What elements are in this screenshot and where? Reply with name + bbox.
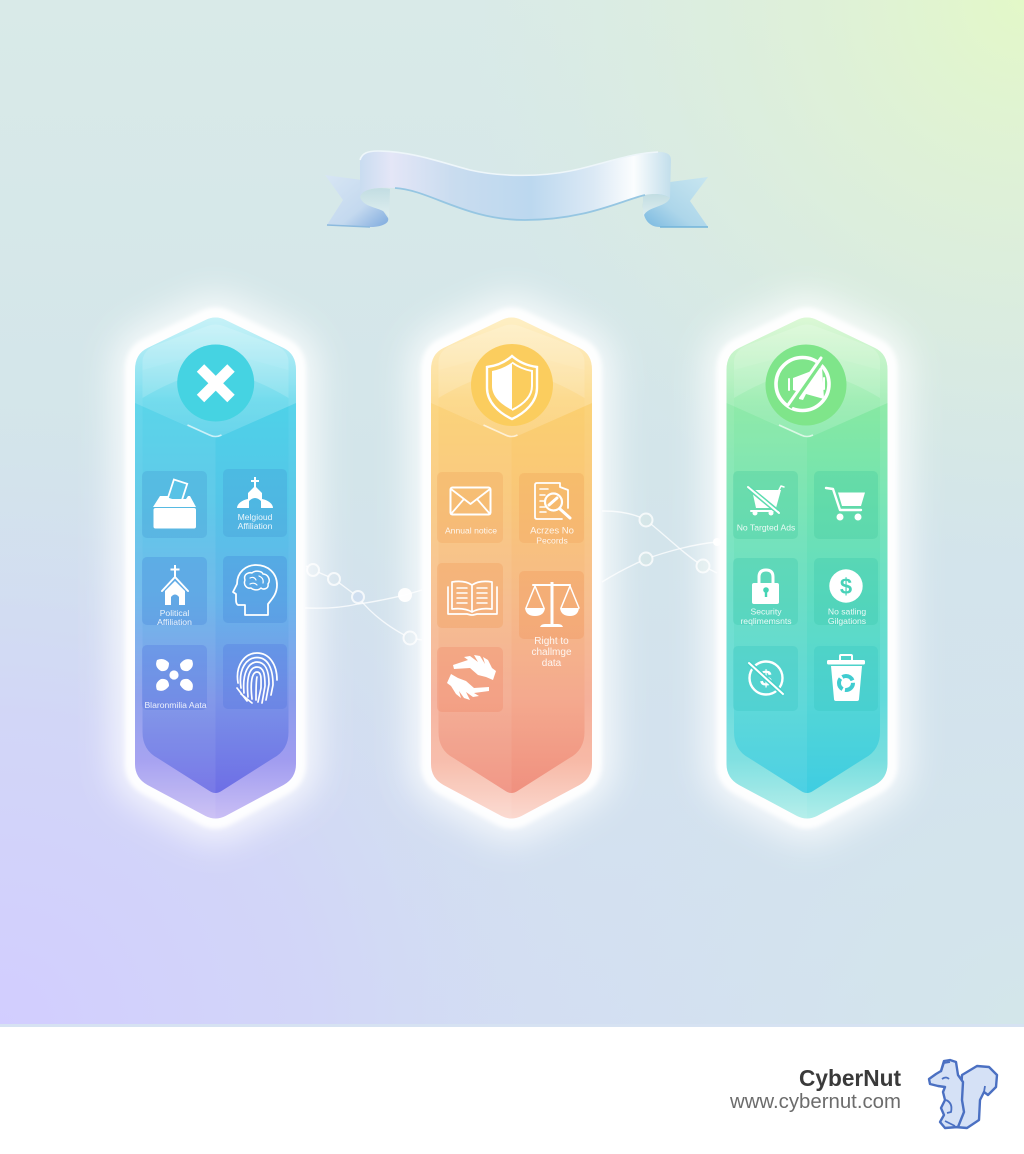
icon: close X in circle: [177, 344, 254, 422]
icon: crossed-out megaphone in circle: [766, 344, 846, 426]
tile: no selling obligations: $: [840, 574, 852, 599]
panel body: [726, 318, 888, 820]
panel: left cyan to violet: [135, 318, 296, 820]
blank ribbon banner: [325, 151, 708, 227]
tile: access to records: Acrzes No: [530, 526, 574, 536]
tile: head with brain: [223, 556, 287, 623]
tile: no selling obligations: Gilgations: [828, 616, 866, 626]
icon: CyberNut squirrel logo: [929, 1060, 997, 1128]
tile: right to challenge data: data: [542, 658, 562, 669]
tile: political affiliation: [142, 557, 207, 627]
tile: right to challenge data: [519, 571, 584, 669]
tile: political affiliation: Political: [160, 608, 189, 618]
tile: recycling bin: [814, 646, 878, 711]
tile: crossed-out dollar: [733, 646, 798, 711]
tile: biometric data: Blaronmilia Aata: [144, 700, 207, 710]
tile: no selling obligations: [814, 558, 878, 626]
tile: crossed-out dollar: $: [760, 666, 772, 691]
panel body: [431, 318, 592, 820]
connector lines: middle to right panel: [602, 511, 721, 582]
brand name: CyberNut: [799, 1065, 901, 1091]
panel: middle amber to coral: [431, 318, 592, 820]
tile: religious affiliation: [223, 469, 287, 537]
tile: security requirements: reqlimemsnts: [740, 616, 792, 626]
tile: right to challenge data: challmge: [531, 647, 572, 658]
tile: access to records: [519, 473, 584, 546]
tile: right to challenge data: Right to: [534, 636, 569, 647]
connector lines: left to middle panel: [305, 564, 422, 644]
tile: access to records: Pecords: [536, 536, 568, 546]
panel body: [135, 318, 296, 820]
tile: handshake hands: [437, 647, 503, 712]
tile: open book: [437, 563, 503, 628]
tile: shopping cart: [814, 471, 878, 539]
brand url: www.cybernut.com: [729, 1091, 901, 1113]
tile: no targeted ads: [733, 471, 798, 539]
tile: ballot box: [142, 471, 207, 538]
tile: religious affiliation: Melgioud: [238, 512, 273, 522]
tile: annual notice: [437, 472, 503, 543]
tile: security requirements: [733, 558, 798, 626]
tile: annual notice: Annual notice: [445, 526, 497, 536]
icon: shield in circle: [471, 344, 553, 426]
panel: right green to aqua: [726, 318, 888, 820]
tile: security requirements: Security: [750, 606, 782, 616]
tile: political affiliation: Affiliation: [157, 617, 192, 627]
tile: fingerprint: [223, 644, 287, 709]
tile: biometric data: [142, 645, 207, 710]
tile: no selling obligations: No satling: [828, 606, 866, 616]
footer band: [0, 1027, 1024, 1154]
tile: religious affiliation: Affiliation: [238, 521, 273, 531]
tile: no targeted ads: No Targted Ads: [737, 522, 795, 532]
